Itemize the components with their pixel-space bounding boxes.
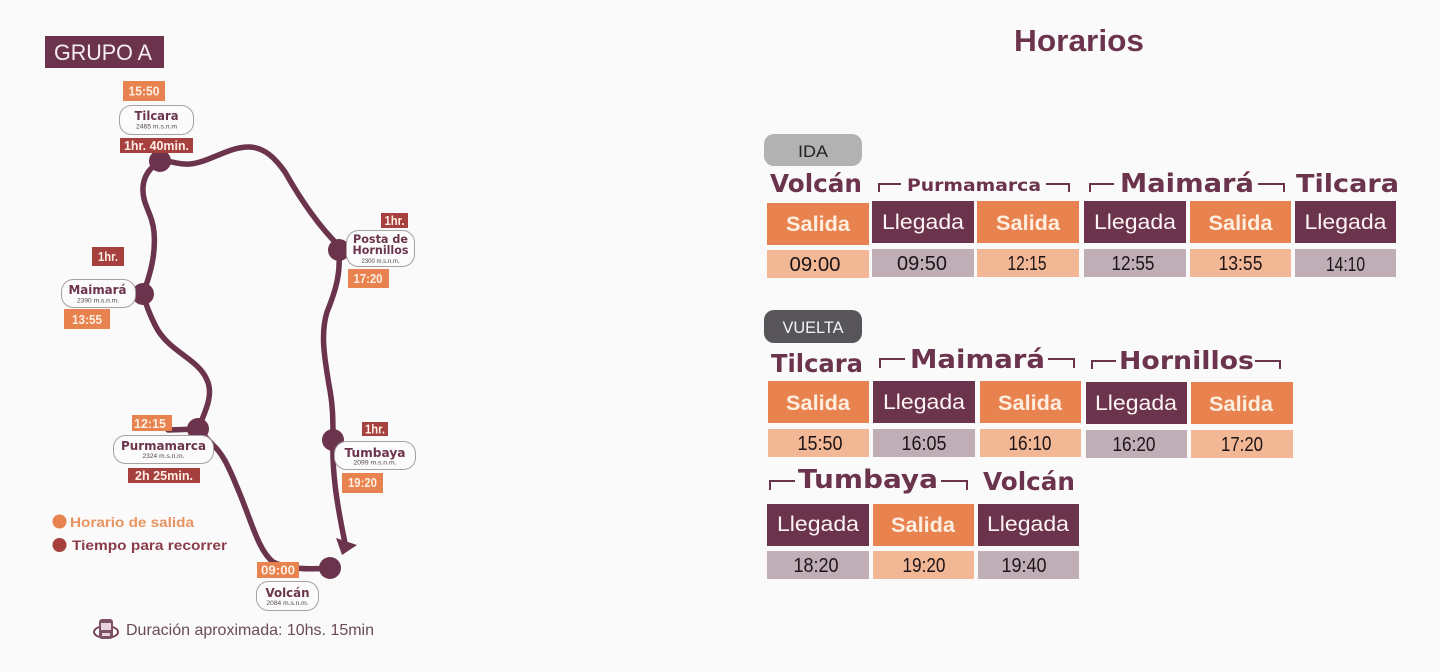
stop headings, second row [770, 465, 1075, 496]
stop: Volcán: 2084 m.s.n.m. [266, 601, 309, 607]
row: header cells, second row: Salida [891, 514, 955, 537]
stop: Tumbaya [334, 422, 416, 493]
row: times, second row: 19:40 [1002, 555, 1046, 577]
stop: Maimará: 2390 m.s.n.m. [77, 298, 119, 304]
badge: IDA [764, 134, 862, 166]
stop headings: Tilcara [1296, 169, 1399, 198]
row: header cells: Llegada [882, 211, 964, 234]
row: times: 14:10 [1326, 254, 1365, 276]
table: IDA [764, 134, 1399, 278]
stop headings, first row [771, 345, 1280, 378]
icon: bus [94, 619, 118, 639]
stop: Maimará: 1hr. [98, 250, 118, 264]
stop headings, first row: Maimará [910, 345, 1045, 375]
stop: Volcán: 09:00 [261, 564, 295, 578]
node: Tilcara [149, 150, 171, 172]
stop: Tumbaya: 2099 m.s.n.m. [354, 460, 397, 466]
row: header cells, first row [768, 381, 1293, 424]
stop: Purmamarca: Purmamarca [121, 439, 206, 453]
stop headings: Purmamarca [907, 176, 1041, 196]
stop: Tilcara: Tilcara [134, 109, 178, 123]
row: times, second row: 19:20 [902, 555, 946, 577]
legend: Horario de salida [70, 514, 194, 530]
badge: IDA: IDA [798, 142, 829, 161]
row: header cells, first row: Salida [786, 392, 850, 415]
heading: Horarios: Horarios [1014, 23, 1144, 58]
stop headings, first row: Tilcara [771, 349, 863, 378]
row: times, second row [767, 551, 1079, 579]
stop: Posta de Hornillos: Posta de [353, 232, 408, 246]
row: header cells, first row: Salida [1209, 393, 1273, 416]
row: times, first row: 15:50 [798, 433, 842, 455]
stop: Volcán: Volcán [266, 586, 310, 600]
stop: Maimará [62, 247, 136, 329]
row: times, first row [768, 429, 1293, 458]
stop: Tilcara: 1hr. 40min. [124, 139, 189, 153]
badge: VUELTA: VUELTA [782, 318, 844, 337]
node: Maimará [132, 283, 154, 305]
stop: Posta de Hornillos: 1hr. [384, 214, 404, 228]
row: times: 09:50 [897, 253, 947, 275]
row: times: 13:55 [1218, 253, 1262, 275]
stop: Purmamarca: 12:15 [134, 417, 166, 431]
stop headings: Volcán [770, 169, 862, 198]
stop: Tumbaya: 1hr. [365, 422, 385, 436]
stop: Purmamarca: 2324 m.s.n.m. [142, 454, 185, 460]
row: header cells: Salida [786, 213, 850, 236]
badge: VUELTA [764, 310, 862, 343]
row: times: 12:55 [1112, 253, 1154, 275]
row: header cells, first row: Llegada [883, 391, 965, 414]
row: header cells: Salida [1208, 212, 1273, 235]
row: header cells, first row: Llegada [1095, 392, 1177, 415]
row: times, first row: 16:05 [902, 433, 946, 455]
row: times, first row: 17:20 [1221, 434, 1263, 456]
stop: Purmamarca [114, 415, 214, 483]
row: header cells, second row: Llegada [987, 513, 1069, 536]
stop: Tilcara [120, 81, 194, 153]
stop: Volcán [256, 562, 318, 610]
stop: Posta de Hornillos: 17:20 [354, 272, 383, 286]
row: header cells: Llegada [1304, 211, 1387, 234]
row: times, first row: 16:10 [1008, 433, 1052, 455]
table: VUELTA [764, 310, 1293, 579]
stop: Posta de Hornillos: Hornillos [352, 243, 409, 257]
heading: GRUPO A [45, 36, 164, 68]
row: times, first row: 16:20 [1112, 434, 1156, 456]
stop: Tumbaya: 19:20 [348, 476, 377, 490]
stop: Purmamarca: 2h 25min. [135, 469, 193, 483]
node: Volcán [319, 557, 341, 579]
stop headings [770, 169, 1399, 199]
stop headings, first row: Hornillos [1119, 346, 1254, 375]
legend [52, 514, 228, 553]
duration note: Duración aproximada: 10hs. 15min [126, 622, 374, 639]
row: times, second row: 18:20 [794, 555, 838, 577]
stop: Tilcara: 15:50 [128, 84, 160, 98]
heading: GRUPO A: GRUPO A [54, 40, 152, 65]
stop headings, second row: Volcán [983, 467, 1075, 496]
stop: Tilcara: 2465 m.s.n.m [136, 124, 177, 130]
row: header cells, first row: Salida [998, 392, 1062, 415]
row: header cells [767, 201, 1396, 245]
stop headings: Maimará [1120, 169, 1254, 199]
node: Purmamarca [187, 418, 209, 440]
row: header cells: Llegada [1094, 211, 1176, 234]
stop: Maimará: Maimará [68, 283, 126, 297]
node: Tumbaya [322, 429, 344, 451]
row: header cells, second row [767, 504, 1079, 546]
panel: schedules [764, 23, 1399, 579]
panel: route map [45, 36, 416, 639]
stop headings, second row: Tumbaya [798, 465, 938, 495]
legend: Tiempo para recorrer [72, 537, 228, 553]
row: times: 12:15 [1008, 253, 1046, 275]
stop: Posta de Hornillos: 2300 m.s.n.m. [362, 259, 400, 265]
node: Posta de Hornillos [328, 239, 350, 261]
row: header cells: Salida [996, 212, 1060, 235]
stop: Posta de Hornillos [346, 213, 414, 288]
stop: Tumbaya: Tumbaya [344, 446, 406, 460]
row: times [767, 249, 1396, 278]
stop: Maimará: 13:55 [72, 313, 102, 327]
route line with arrow [143, 147, 357, 569]
row: header cells, second row: Llegada [777, 513, 859, 536]
row: times: 09:00 [790, 254, 840, 276]
